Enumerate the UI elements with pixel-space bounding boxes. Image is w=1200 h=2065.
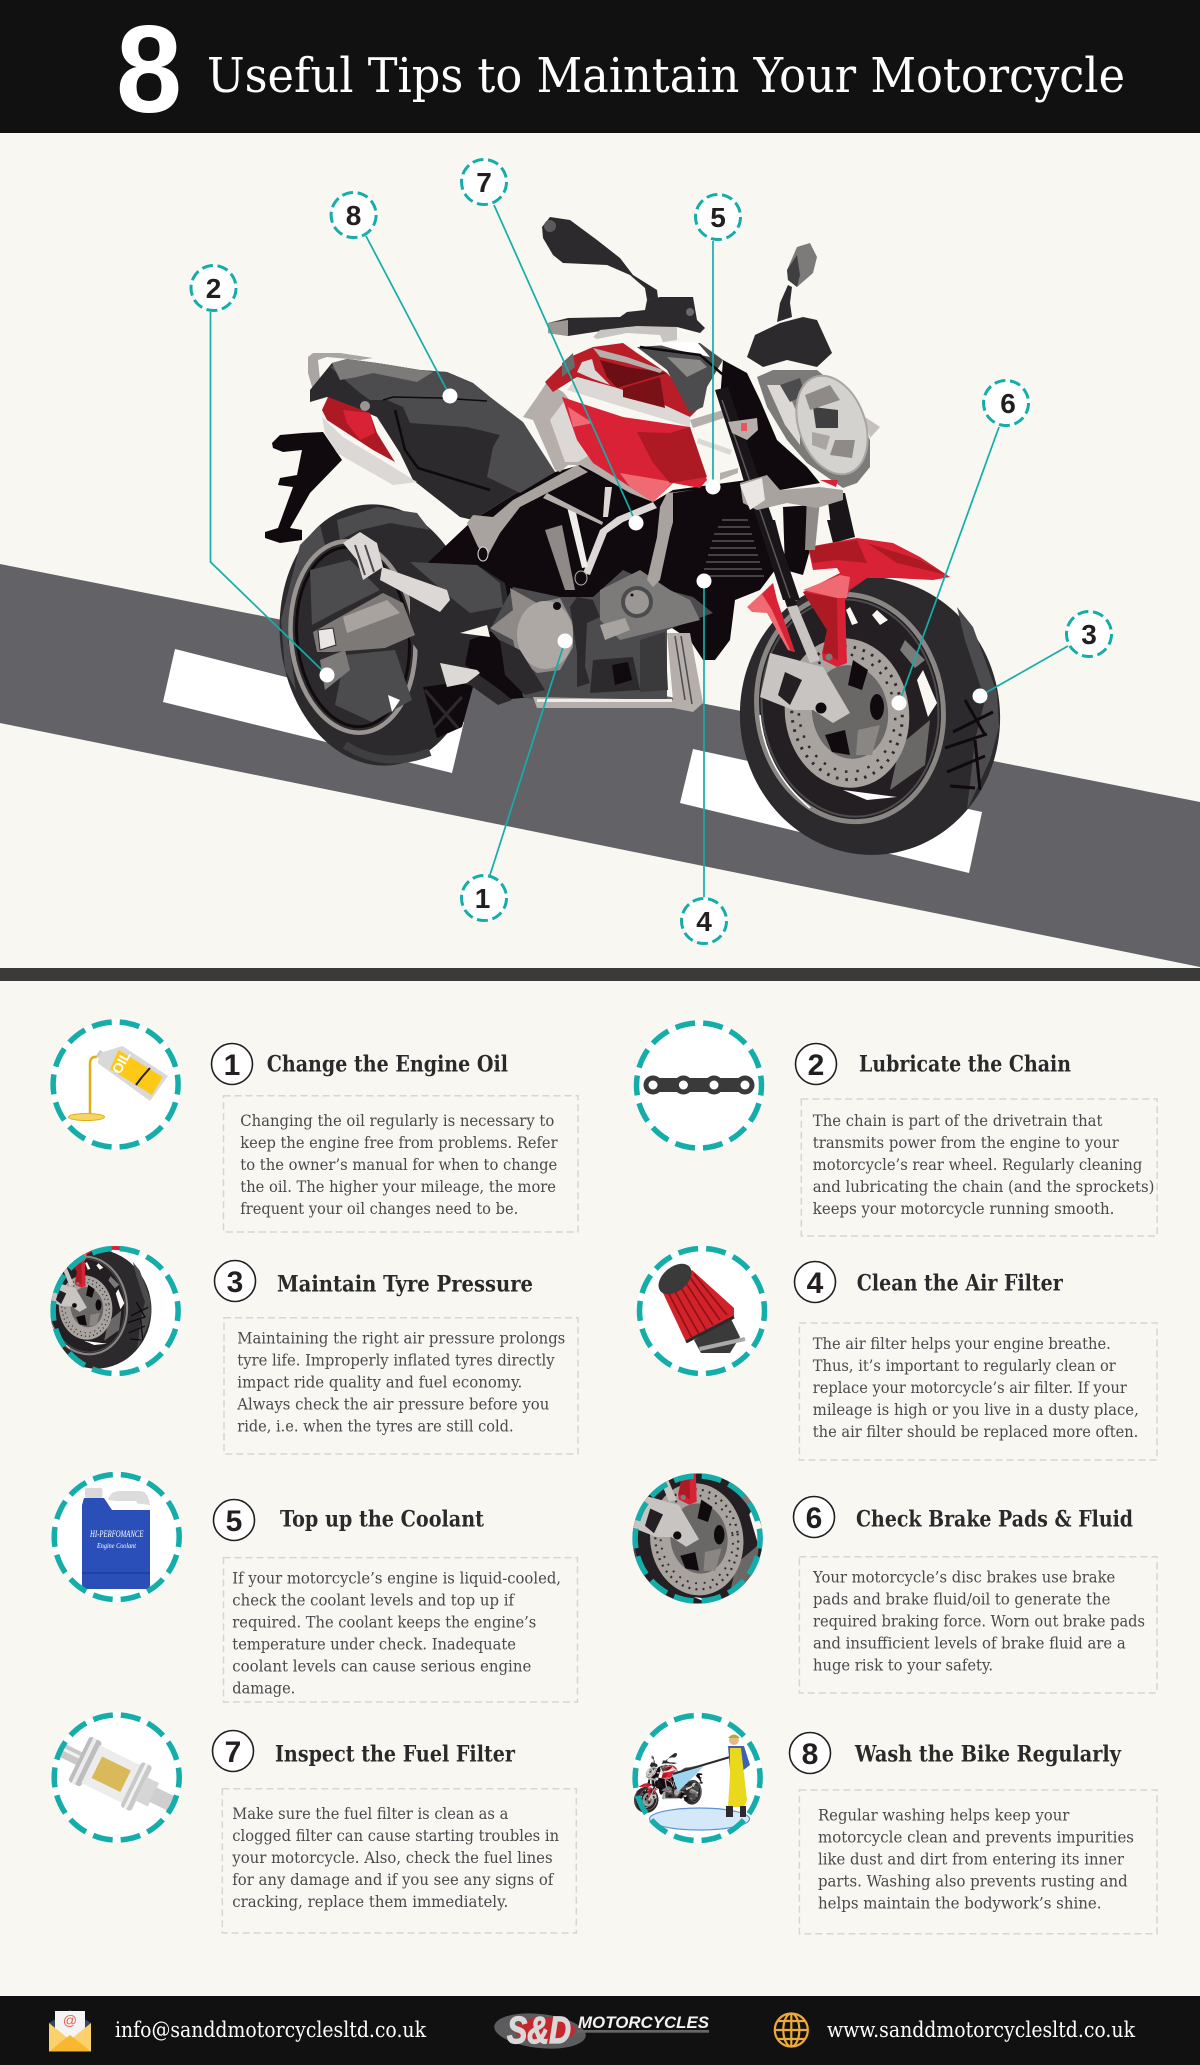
text box: [799, 1790, 1157, 1934]
text box: Changing the oil regularly is necessary to: [240, 1112, 554, 1130]
text box: Maintaining the right air pressure prolongs: [237, 1329, 565, 1347]
tip 1 panel: [51, 1020, 578, 1232]
icon: air filter: [637, 1246, 767, 1376]
text box: the air filter should be replaced more often.: [813, 1423, 1138, 1441]
tip 2 panel: [634, 1020, 1157, 1236]
icon: email envelope: [49, 2010, 91, 2052]
callout 4: 4: [696, 906, 712, 937]
callout 2: 2: [206, 273, 221, 304]
icon: brake disc: [632, 1473, 763, 1604]
title: Useful Tips to Maintain Your Motorcycle: [207, 48, 1125, 104]
text box: ride, i.e. when the tyres are still cold.: [237, 1417, 514, 1435]
number 3: [214, 1260, 256, 1302]
icon: chain: [634, 1020, 764, 1150]
callout 7: 7: [476, 167, 492, 198]
text box: [224, 1096, 578, 1232]
tip 3 panel: [50, 1246, 579, 1455]
number 8: 8: [802, 1738, 818, 1771]
heading: Clean the Air Filter: [857, 1271, 1064, 1297]
callout 2: [191, 266, 236, 310]
text box: cracking, replace them immediately.: [232, 1893, 508, 1911]
text box: [224, 1318, 578, 1454]
frame and engine backing: [420, 465, 775, 700]
heading: Check Brake Pads & Fluid: [856, 1506, 1133, 1532]
front fork upper tube: [715, 387, 855, 600]
motorcycle illustration: [265, 217, 1014, 868]
tip 7 panel: [48, 1712, 576, 1933]
text box: [799, 1557, 1157, 1693]
text box: and insufficient levels of brake fluid are a: [813, 1635, 1126, 1653]
icon: coolant jug: HI-PERFOMANCE: [89, 1529, 144, 1539]
number 2: [796, 1044, 836, 1084]
header band: [0, 0, 1200, 139]
number 6: [794, 1496, 834, 1538]
text box: [799, 1323, 1157, 1460]
text box: pads and brake fluid/oil to generate the: [813, 1591, 1110, 1609]
text box: [224, 1558, 578, 1702]
icon: coolant jug: [52, 1472, 182, 1602]
number 4: [794, 1262, 836, 1302]
text box: Regular washing helps keep your: [818, 1807, 1070, 1825]
callout 8: 8: [346, 200, 361, 231]
icon: fuel filter: [48, 1712, 182, 1842]
text box: mileage is high or you live in a dusty place,: [813, 1401, 1139, 1419]
fuel tank: [523, 343, 707, 502]
headlight: [757, 366, 880, 488]
number 8: [790, 1732, 830, 1774]
text box: helps maintain the bodywork’s shine.: [818, 1895, 1102, 1913]
black gap behind fork: [720, 360, 820, 490]
number 6: 6: [806, 1502, 822, 1535]
email address: info@sanddmotorcyclesltd.co.uk: [115, 2018, 426, 2042]
footer band: [0, 1996, 1200, 2065]
right mirror: [777, 243, 817, 322]
icon: motor oil bottle: [51, 1020, 181, 1150]
callout 3: 3: [1081, 619, 1097, 650]
text box: coolant levels can cause serious engine: [232, 1658, 531, 1676]
engine block: [490, 570, 713, 712]
icon: man washing bike: [633, 1713, 763, 1843]
callout 3: [1066, 612, 1112, 656]
number 1: 1: [224, 1049, 240, 1082]
text box: Make sure the fuel filter is clean as a: [232, 1805, 508, 1823]
text box: The air filter helps your engine breathe.: [813, 1335, 1111, 1353]
text box: keeps your motorcycle running smooth.: [813, 1200, 1114, 1218]
rear red tail panel: [322, 397, 417, 485]
heading: Change the Engine Oil: [267, 1052, 508, 1078]
heading: Top up the Coolant: [280, 1506, 485, 1532]
number 3: 3: [227, 1266, 243, 1299]
tip 8 panel: [633, 1713, 1157, 1934]
text box: Thus, it’s important to regularly clean or: [813, 1357, 1116, 1375]
callout 8: [331, 192, 376, 238]
callout anchor dots: [320, 388, 988, 710]
seat: [308, 353, 555, 520]
rear wheel: [267, 494, 489, 776]
text box: to the owner’s manual for when to change: [240, 1156, 557, 1174]
text box: required. The coolant keeps the engine’s: [232, 1614, 536, 1632]
text box: impact ride quality and fuel economy.: [237, 1373, 522, 1391]
text box: clogged filter can cause starting troubles in: [232, 1827, 559, 1845]
number 5: [214, 1500, 254, 1540]
text box: Always check the air pressure before you: [236, 1395, 549, 1413]
heading: Maintain Tyre Pressure: [277, 1272, 533, 1298]
logo: S&D Motorcycles: [492, 2009, 709, 2053]
text box: transmits power from the engine to your: [813, 1134, 1119, 1152]
headlight cowl: [747, 317, 832, 367]
callout 1: 1: [475, 883, 490, 914]
number 1: [212, 1044, 252, 1084]
callout 6: 6: [1000, 388, 1016, 419]
front wheel, disc and fender: [726, 520, 1014, 868]
callout 4: [682, 898, 726, 944]
logo: S&D Motorcycles: S&D: [507, 2010, 571, 2052]
icon: email envelope: @: [63, 2012, 77, 2028]
tip 5 panel: [52, 1472, 577, 1702]
text box: the oil. The higher your mileage, the more: [240, 1178, 556, 1196]
text box: frequent your oil changes need to be.: [240, 1200, 518, 1218]
icon: motor oil bottle: OIL: [109, 1048, 134, 1076]
number 5: 5: [226, 1505, 242, 1538]
text box: check the coolant levels and top up if: [232, 1592, 515, 1610]
text box: your motorcycle. Also, check the fuel lines: [231, 1849, 553, 1867]
text box: tyre life. Improperly inflated tyres directly: [237, 1351, 555, 1369]
icon: front tyre: [50, 1246, 181, 1376]
big number 8: 8: [116, 1, 182, 139]
number 2: 2: [808, 1049, 824, 1082]
text box: damage.: [232, 1680, 295, 1698]
tip 4 panel: [637, 1246, 1157, 1460]
text box: Your motorcycle’s disc brakes use brake: [812, 1569, 1115, 1587]
left mirror and handlebar: [542, 217, 705, 342]
text box: [801, 1099, 1157, 1236]
text box: temperature under check. Inadequate: [232, 1636, 516, 1654]
number 7: 7: [225, 1736, 241, 1769]
text box: motorcycle clean and prevents impurities: [818, 1829, 1134, 1847]
text box: motorcycle’s rear wheel. Regularly cleaning: [813, 1156, 1142, 1174]
callout 5: [696, 194, 740, 240]
callout 6: [984, 380, 1028, 426]
top of fuel tank cables: [637, 342, 735, 413]
callout 1: [462, 876, 506, 920]
frame tubes: [467, 410, 738, 590]
heading: Wash the Bike Regularly: [854, 1742, 1122, 1768]
text box: keep the engine free from problems. Refer: [240, 1134, 558, 1152]
text box: and lubricating the chain (and the sprockets): [813, 1178, 1154, 1196]
icon: globe: [775, 2014, 808, 2046]
text box: required braking force. Worn out brake pads: [813, 1613, 1145, 1631]
text box: The chain is part of the drivetrain that: [813, 1112, 1103, 1130]
divider bar: [0, 968, 1200, 981]
text box: If your motorcycle’s engine is liquid-cooled,: [232, 1570, 561, 1588]
text box: like dust and dirt from entering its inner: [818, 1851, 1125, 1869]
logo: S&D Motorcycles: MOTORCYCLES: [578, 2014, 709, 2032]
radiator: [673, 483, 813, 590]
text box: replace your motorcycle’s air filter. If your: [813, 1379, 1127, 1397]
callout lines: [210, 205, 1068, 897]
text box: parts. Washing also prevents rusting and: [818, 1873, 1128, 1891]
callout 7: [462, 160, 506, 204]
number 4: 4: [807, 1267, 824, 1300]
swingarm and rear suspension: [313, 532, 512, 705]
text box: [222, 1789, 576, 1933]
rear stand bracket: [265, 432, 342, 543]
heading: Inspect the Fuel Filter: [275, 1742, 516, 1768]
tip 6 panel: [632, 1473, 1158, 1694]
icon: coolant jug: Engine Coolant: [96, 1541, 137, 1550]
website address: www.sanddmotorcyclesltd.co.uk: [827, 2018, 1135, 2042]
number 7: [212, 1730, 254, 1772]
heading: Lubricate the Chain: [859, 1052, 1071, 1078]
callout 5: 5: [710, 202, 726, 233]
text box: for any damage and if you see any signs of: [232, 1871, 555, 1889]
text box: huge risk to your safety.: [813, 1657, 993, 1675]
road with lane markings: [0, 564, 1200, 967]
